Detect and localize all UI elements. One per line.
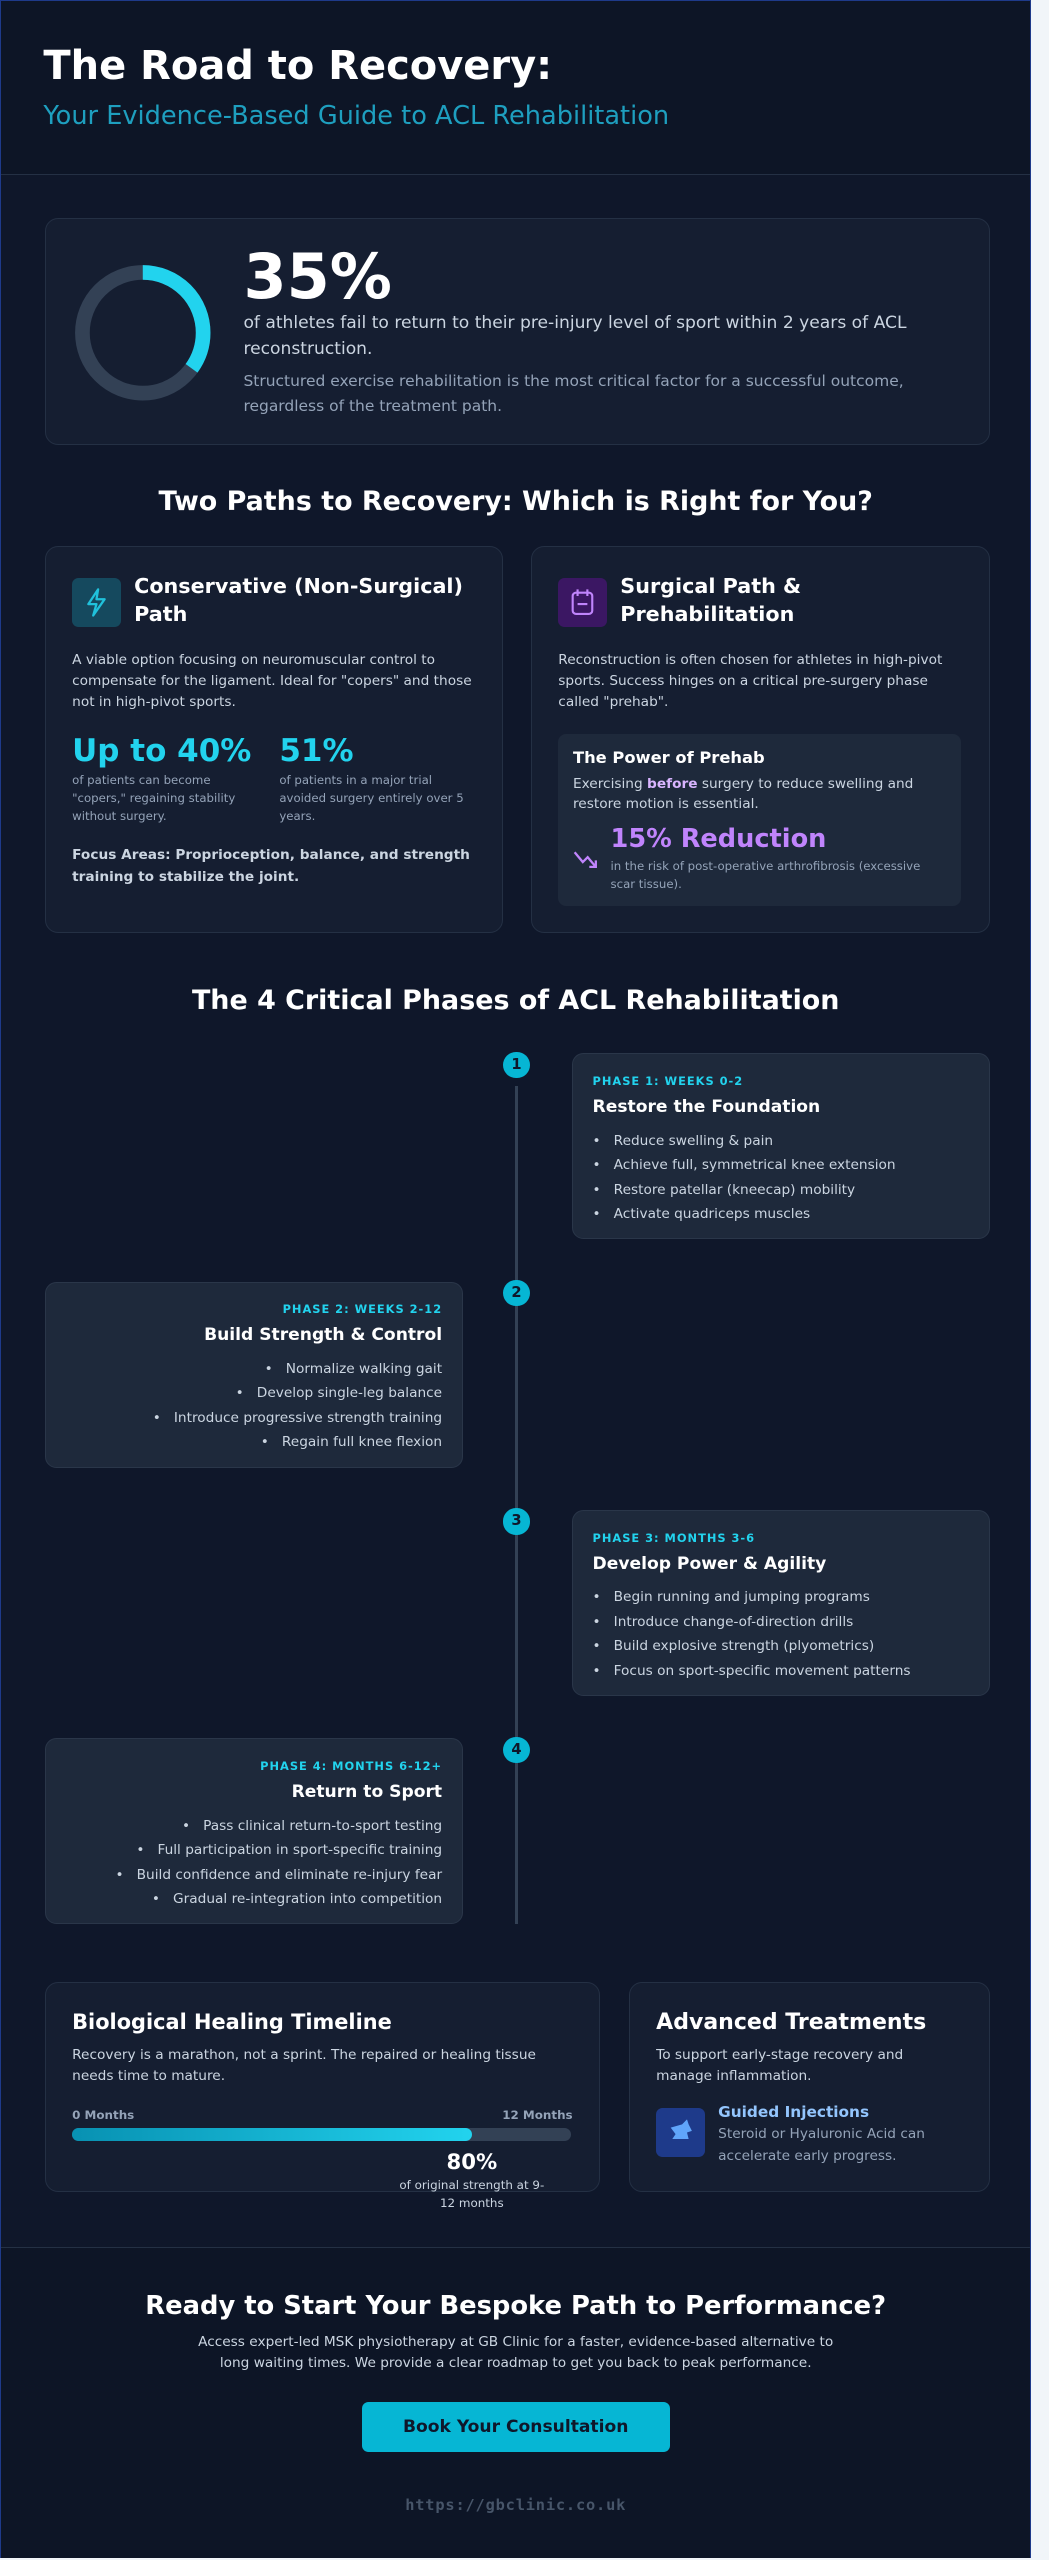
callout: power of prehab: Exercising before surgery to reduce swelling and restore motion is essential.	[573, 776, 913, 812]
title: Surgical Path & Prehabilitation	[620, 574, 801, 626]
heading: two paths: Two Paths to Recovery: Which is Right for You?	[159, 486, 873, 517]
callout: power of prehab	[558, 734, 961, 906]
stat number: 35%	[243, 240, 392, 313]
phase 4 card: Full participation in sport-specific training	[157, 1842, 442, 1858]
stat: 51%: 51%	[279, 733, 354, 769]
title: Conservative (Non-Surgical) Path	[134, 574, 463, 626]
phase 1 card: Reduce swelling & pain	[614, 1133, 773, 1149]
panel: healing timeline: 12 Months	[502, 2108, 573, 2122]
button	[362, 2402, 670, 2452]
phase 3 card: Begin running and jumping programs	[614, 1589, 870, 1605]
phase 2 card: Normalize walking gait	[286, 1361, 442, 1377]
callout: power of prehab: in the risk of post-operative arthrofibrosis (excessive scar tissue).	[610, 859, 920, 891]
phase 4 marker	[503, 1737, 530, 1763]
phase 3 card: Develop Power & Agility	[593, 1554, 826, 1574]
subtitle: Your Evidence-Based Guide to ACL Rehabilitation	[43, 100, 669, 130]
stat: 80%	[399, 2149, 544, 2210]
description: A viable option focusing on neuromuscular control to compensate for the ligament. Ideal for "copers" and those not in high-pivot sports.	[72, 652, 472, 710]
phase 1 marker	[503, 1052, 530, 1078]
panel: healing timeline	[45, 1982, 600, 2192]
phase 2 card: Develop single-leg balance	[257, 1385, 442, 1401]
phase 1 card: Restore the Foundation	[593, 1097, 820, 1117]
panel: advanced treatments: To support early-stage recovery and manage inflammation.	[656, 2046, 903, 2084]
stat: up to 40%: Up to 40%	[72, 733, 251, 769]
phase 2 card: Build Strength & Control	[204, 1325, 442, 1345]
stat: 80%: 80%	[446, 2149, 497, 2174]
phase 1 marker: 1	[511, 1056, 522, 1073]
timeline line	[515, 1086, 518, 1924]
phase 3 card: Focus on sport-specific movement patterns	[614, 1663, 911, 1679]
phase 2 card: Regain full knee flexion	[282, 1434, 442, 1450]
panel: advanced treatments: Guided Injections	[718, 2103, 869, 2121]
phase 3 card	[572, 1510, 990, 1696]
panel: advanced treatments	[629, 1982, 990, 2192]
phase 4 card: PHASE 4: MONTHS 6-12+	[260, 1759, 442, 1773]
panel: advanced treatments: Steroid or Hyaluronic Acid can accelerate early progress.	[718, 2126, 925, 2164]
phase 2 marker	[503, 1280, 530, 1306]
phase 3 marker	[503, 1508, 530, 1534]
icon: syringe	[656, 2108, 705, 2157]
panel: surgical path	[531, 546, 990, 933]
panel: key stat	[45, 218, 990, 445]
stat: 51%	[279, 733, 464, 823]
button: Book Your Consultation	[403, 2417, 628, 2437]
phase 1 card: Activate quadriceps muscles	[614, 1206, 810, 1222]
stat: up to 40%	[72, 733, 251, 823]
callout: power of prehab: 15% Reduction	[610, 824, 826, 854]
phase 1 card: Restore patellar (kneecap) mobility	[614, 1182, 855, 1198]
phase 4 marker: 4	[511, 1741, 522, 1758]
icon: trend down	[574, 852, 597, 868]
header	[1, 1, 1030, 175]
icon: lightning	[72, 578, 121, 627]
phase 3 card: Build explosive strength (plyometrics)	[614, 1638, 874, 1654]
CTA text: Access expert-led MSK physiotherapy at GB Clinic for a faster, evidence-based alternative to long waiting times. We provide a clear roadmap to get you back to peak performance.	[198, 2334, 833, 2371]
phase 2 card	[45, 1282, 463, 1468]
panel: advanced treatments: Advanced Treatments	[656, 2010, 926, 2035]
focus areas: Focus Areas: Proprioception, balance, and strength training to stabilize the joint.	[72, 847, 470, 885]
phase 4 card	[45, 1738, 463, 1924]
heading: 4 phases: The 4 Critical Phases of ACL Rehabilitation	[192, 985, 839, 1016]
icon: calendar	[558, 578, 607, 627]
phase 2 card: Introduce progressive strength training	[174, 1410, 442, 1426]
phase 3 marker: 3	[511, 1512, 522, 1529]
callout: power of prehab: The Power of Prehab	[573, 748, 765, 767]
donut chart 35%	[75, 265, 210, 400]
stat: 80%: of original strength at 9-12 months	[399, 2178, 544, 2210]
phase 1 card: Achieve full, symmetrical knee extension	[614, 1157, 896, 1173]
phase 3 card: Introduce change-of-direction drills	[614, 1614, 853, 1630]
panel: healing timeline: 0 Months	[72, 2108, 134, 2122]
panel: healing timeline: Recovery is a marathon, not a sprint. The repaired or healing tissue needs time to mature.	[72, 2046, 536, 2084]
progress bar 80%	[72, 2128, 571, 2141]
panel: conservative path	[45, 546, 503, 933]
stat: up to 40%: of patients can become "copers," regaining stability without surgery.	[72, 773, 235, 823]
stat text: of athletes fail to return to their pre-injury level of sport within 2 years of ACL reconstruction.	[243, 313, 906, 359]
description: Reconstruction is often chosen for athletes in high-pivot sports. Success hinges on a critical pre-surgery phase called "prehab".	[558, 652, 942, 710]
phase 2 card: PHASE 2: WEEKS 2-12	[283, 1302, 442, 1316]
title: The Road to Recovery:	[43, 43, 552, 89]
panel: healing timeline: Biological Healing Timeline	[72, 2010, 392, 2034]
CTA heading: Ready to Start Your Bespoke Path to Performance?	[145, 2291, 886, 2321]
phase 4 card: Pass clinical return-to-sport testing	[203, 1818, 442, 1834]
url: https://gbclinic.co.uk	[405, 2496, 626, 2514]
phase 3 card: PHASE 3: MONTHS 3-6	[593, 1531, 755, 1545]
stat note: Structured exercise rehabilitation is the most critical factor for a successful outcome, regardless of the treatment path.	[243, 372, 904, 415]
phase 2 marker: 2	[511, 1284, 522, 1301]
phase 4 card: Gradual re-integration into competition	[173, 1891, 442, 1907]
phase 1 card	[572, 1053, 990, 1239]
stat: 51%: of patients in a major trial avoided surgery entirely over 5 years.	[279, 773, 464, 823]
phase 4 card: Build confidence and eliminate re-injury fear	[137, 1867, 442, 1883]
phase 1 card: PHASE 1: WEEKS 0-2	[593, 1074, 743, 1088]
phase 4 card: Return to Sport	[292, 1782, 442, 1802]
CTA section	[1, 2247, 1030, 2558]
